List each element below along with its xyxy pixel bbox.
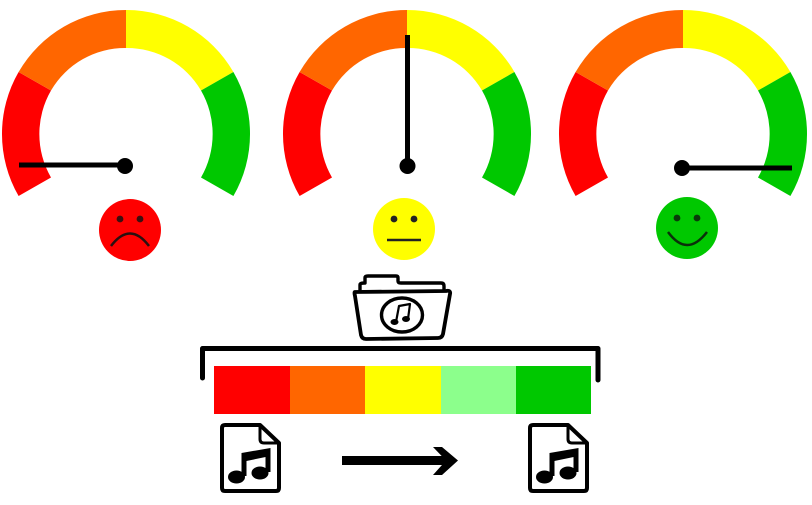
bracket: [202, 348, 598, 380]
icon: sad face: [99, 199, 161, 261]
gauge: high: [559, 10, 807, 196]
quality colour bar: [214, 366, 591, 414]
gauge: low: [2, 10, 250, 196]
needle: high: [682, 166, 792, 170]
needle hub: high: [674, 160, 690, 176]
needle hub: medium: [400, 158, 416, 174]
icon: music folder: [354, 276, 450, 339]
icon: target music file: [530, 425, 587, 491]
needle hub: low: [117, 158, 133, 174]
needle: low: [19, 162, 125, 168]
icon: neutral face: [373, 198, 435, 260]
needle: medium: [405, 35, 410, 166]
icon: happy face: [656, 197, 718, 259]
gauge: medium: [283, 10, 531, 196]
arrow: [342, 447, 458, 475]
icon: source music file: [222, 425, 279, 491]
